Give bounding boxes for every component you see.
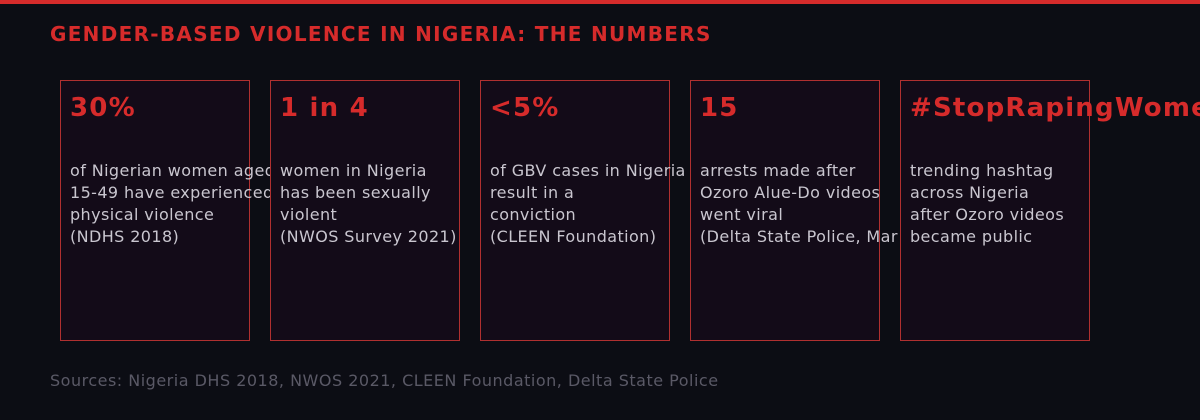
panel: 15: went viral — [700, 205, 783, 224]
panel: hashtag: after Ozoro videos — [910, 205, 1064, 224]
panel: hashtag — [900, 80, 1200, 340]
panel: 1 in 4: has been sexually — [280, 183, 431, 202]
panel: 1 in 4 — [270, 80, 460, 340]
panel: hashtag: across Nigeria — [910, 183, 1029, 202]
panel: 1 in 4: violent — [280, 205, 337, 224]
panel: 30%: of Nigerian women aged — [70, 161, 275, 180]
panel: <5%: <5% — [490, 93, 560, 123]
panel: <5%: (CLEEN Foundation) — [490, 227, 656, 246]
panel: 30%: 30% — [70, 93, 136, 123]
panel: 1 in 4: (NWOS Survey 2021) — [280, 227, 457, 246]
sources: Sources: Nigeria DHS 2018, NWOS 2021, CLEEN Foundation, Delta State Police — [50, 371, 719, 390]
panel: <5%: conviction — [490, 205, 576, 224]
panel: 30%: (NDHS 2018) — [70, 227, 179, 246]
panel: 30%: physical violence — [70, 205, 214, 224]
panel: 15: arrests made after — [700, 161, 856, 180]
panel: 15 — [690, 80, 898, 340]
panel: 15: (Delta State Police, Mar — [700, 227, 898, 246]
panel: <5%: of GBV cases in Nigeria — [490, 161, 686, 180]
panel: <5%: result in a — [490, 183, 574, 202]
panel: 15: Ozoro Alue-Do videos — [700, 183, 880, 202]
panel: 1 in 4: women in Nigeria — [280, 161, 427, 180]
panel: 30% — [60, 80, 275, 340]
panel: hashtag: became public — [910, 227, 1032, 246]
panel: <5% — [480, 80, 686, 340]
panel: 15: 15 — [700, 93, 739, 123]
panel: 1 in 4: 1 in 4 — [280, 93, 369, 123]
panel: hashtag: trending hashtag — [910, 161, 1054, 180]
panel: 30%: 15-49 have experienced — [70, 183, 274, 202]
title: GENDER-BASED VIOLENCE IN NIGERIA: THE NUMBERS — [50, 22, 712, 46]
